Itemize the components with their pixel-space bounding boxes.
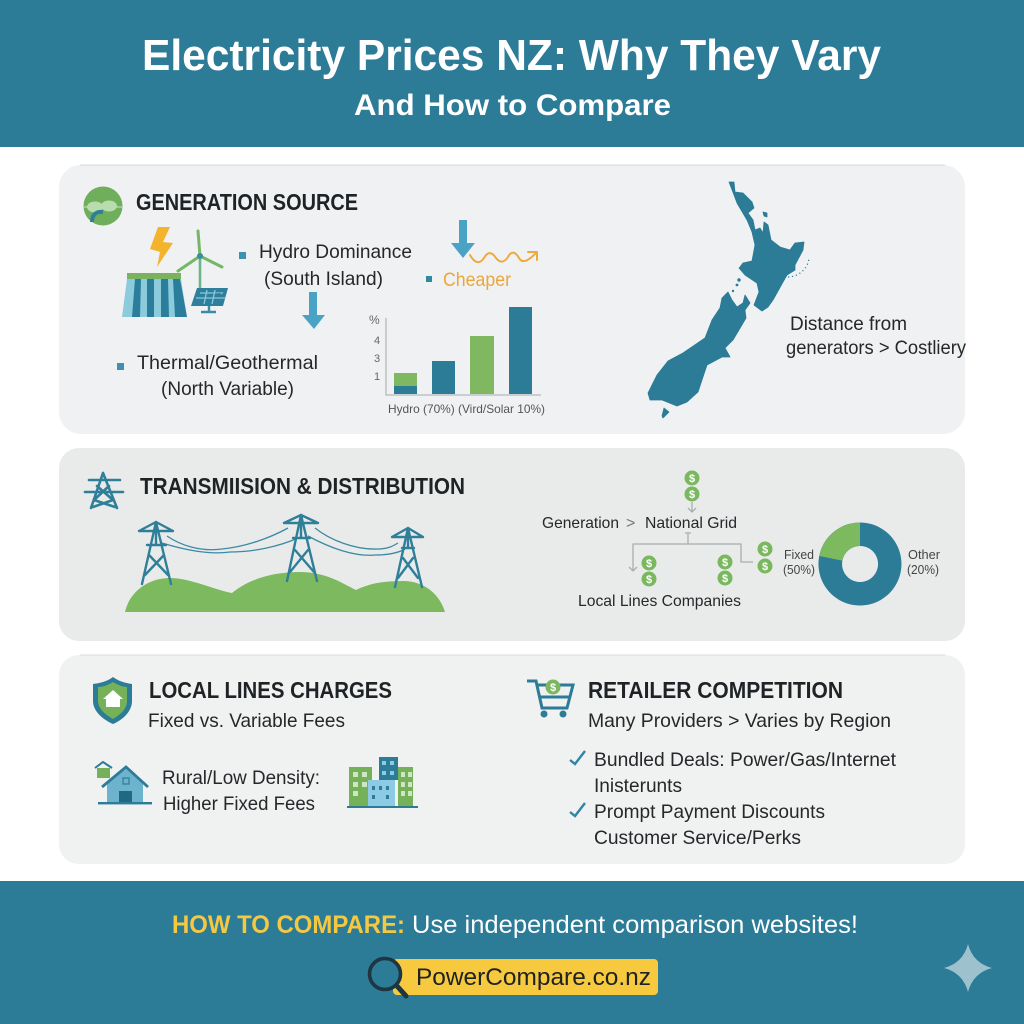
icon: shopping cart with coin: $ [550,682,556,694]
call to action [172,911,858,939]
money coins: $ [646,574,652,586]
bar chart: generation mix: Hydro (70%) (Vird/Solar 10%) [388,402,545,416]
donut chart: (50%) [783,563,815,577]
call to action: Use independent comparison websites! [412,911,858,939]
icon: shopping cart with coin [527,680,573,718]
checklist: Inisterunts [594,775,682,797]
heading: generation source: GENERATION SOURCE [136,189,358,215]
text: rural low density: Higher Fixed Fees [163,793,315,815]
text: rural low density [162,767,320,815]
bar chart: generation mix: 4 [374,335,380,347]
money coins: $ [646,558,652,570]
heading: transmission: TRANSMIISION & DISTRIBUTION [140,473,465,499]
illustration: hills [125,572,445,612]
checklist: Prompt Payment Discounts [594,801,825,823]
arrow: orange wave [470,252,537,262]
money coins: $ [722,557,728,569]
bullet: thermal geothermal: Thermal/Geothermal [137,352,318,374]
donut chart: Other [908,548,940,562]
bar chart: generation mix: % [369,313,380,327]
panel: local lines and retailer [59,655,965,864]
bullet: hydro dominance: Hydro Dominance [259,241,412,263]
icon: rural house [95,762,152,804]
bullet: hydro dominance [239,241,412,290]
icon: generation badge [84,186,122,226]
bullet: hydro dominance: (South Island) [264,268,383,290]
panel: generation source [59,165,966,434]
header band [0,0,1024,147]
search bar: PowerCompare: PowerCompare.co.nz [416,964,651,991]
money coins: $ [689,489,695,501]
icon: city buildings [347,757,418,808]
subheading: many providers: Many Providers > Varies by Region [588,710,891,732]
subtitle: And How to Compare [354,89,671,122]
money coins: $ [689,473,695,485]
icon: sparkle [944,944,992,992]
money coins: $ [722,573,728,585]
search bar: PowerCompare [370,958,658,996]
call to action: HOW TO COMPARE: [172,911,405,939]
bullet: thermal geothermal: (North Variable) [161,378,294,400]
map: New Zealand [648,182,809,418]
connector lines [629,502,753,571]
flow labels [542,515,741,610]
subheading: fixed vs variable: Fixed vs. Variable Fees [148,710,345,732]
panel: transmission and distribution [59,448,965,641]
illustration: power lines [139,515,423,587]
map caption: Distance from [790,313,907,335]
money coins: $ [762,544,768,556]
heading: retailer competition: RETAILER COMPETITION [588,677,843,703]
bullet: thermal geothermal [117,352,318,400]
arrow: hydro down [302,292,325,329]
flow labels: National Grid [645,515,737,532]
money coins [642,470,772,586]
icon: power plant with turbine and solar panel [122,227,228,317]
flow diagram: generation to local lines [542,470,772,610]
bar chart: generation mix [369,307,545,416]
icon: shield with house [93,677,132,724]
text: rural low density: Rural/Low Density: [162,767,320,789]
donut chart [783,522,940,605]
checklist [570,749,897,849]
checklist: Customer Service/Perks [594,827,801,849]
map caption: generators > Costliery [786,337,966,359]
footer band [0,881,1024,1024]
arrow: cheaper down [451,220,475,258]
icon: pylon [85,473,123,508]
flow labels: Generation [542,515,619,532]
bar chart: generation mix: 3 [374,353,380,365]
map caption [786,313,966,359]
checklist: Bundled Deals: Power/Gas/Internet [594,749,897,771]
money coins: $ [762,561,768,573]
flow labels: > [626,515,635,532]
bar chart: generation mix: 1 [374,371,380,383]
donut chart: (20%) [907,563,939,577]
flow labels: Local Lines Companies [578,593,741,610]
bullet: cheaper: Cheaper [443,269,511,291]
heading: local lines charges: LOCAL LINES CHARGES [149,677,392,703]
title: Electricity Prices NZ: Why They Vary [142,31,881,80]
donut chart: Fixed [784,548,814,562]
